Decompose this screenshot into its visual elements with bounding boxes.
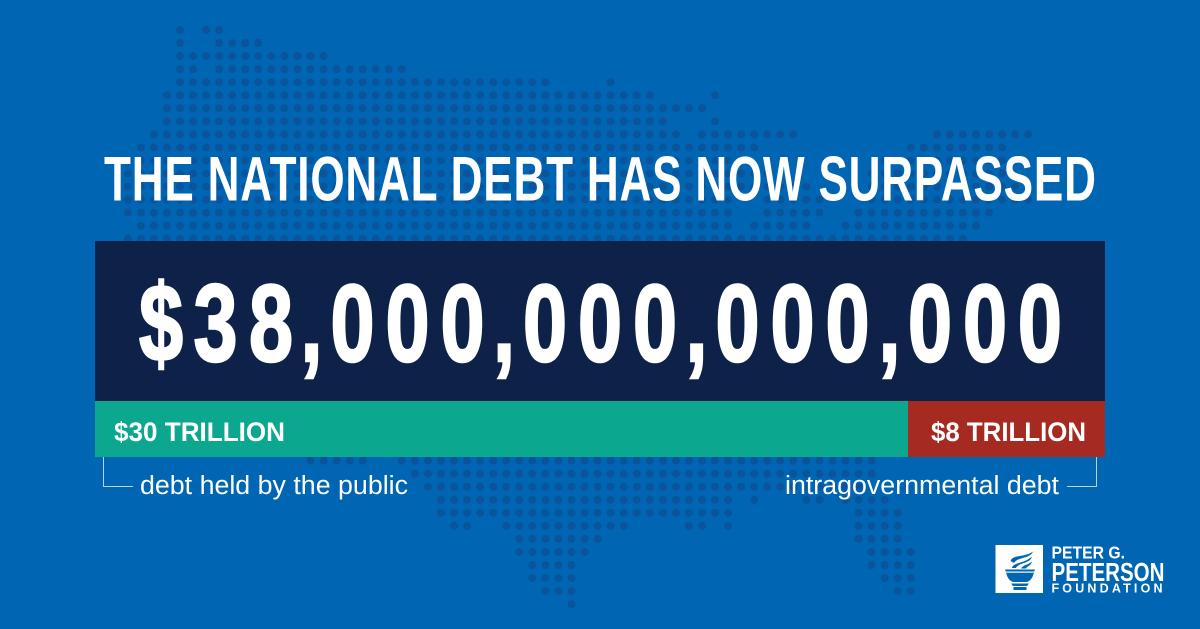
callout: intragovernmental debt (785, 457, 1096, 500)
callout: debt held by the public: debt held by the public (140, 472, 408, 500)
debt amount: $38,000,000,000,000 (139, 262, 1062, 385)
logo wordmark: PETER G. (1052, 542, 1125, 562)
segment: debt held by the public (95, 401, 908, 457)
logo wordmark (1052, 542, 1164, 596)
navy background bar (95, 241, 1105, 401)
segment: debt held by the public: $30 TRILLION (114, 417, 285, 447)
segment: intragovernmental debt: $8 TRILLION (931, 417, 1086, 447)
title: THE NATIONAL DEBT HAS NOW SURPASSED (104, 144, 1096, 214)
logo wordmark: FOUNDATION (1052, 582, 1162, 596)
segment: intragovernmental debt (908, 401, 1105, 457)
panel: total debt figure (95, 241, 1105, 401)
dotted map of the United States (128, 30, 1029, 604)
logo wordmark: PETERSON (1052, 557, 1164, 587)
callout: debt held by the public (104, 457, 408, 500)
logo: Peter G. Peterson Foundation (996, 542, 1164, 596)
callout: intragovernmental debt: intragovernmental debt (785, 472, 1059, 500)
icon: torch (996, 545, 1043, 593)
